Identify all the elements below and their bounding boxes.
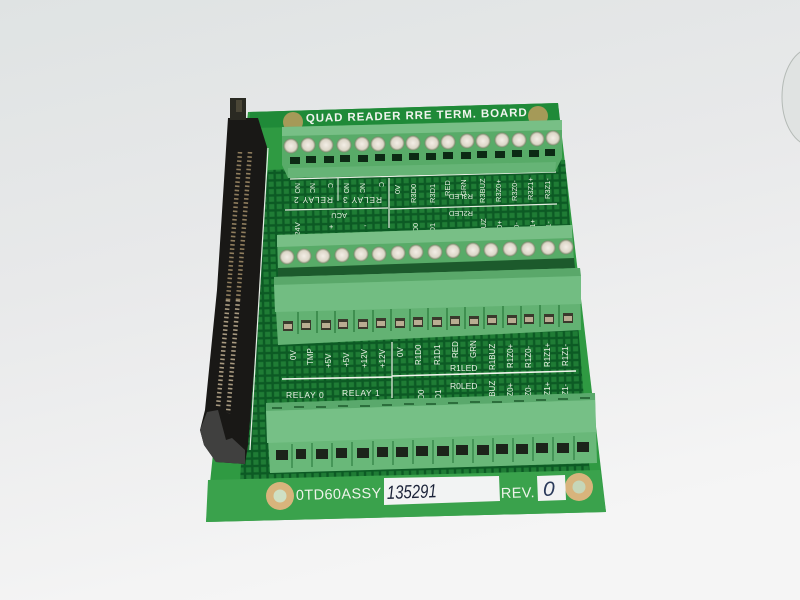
silkscreen labels upper section: RELAY 3 [342,195,382,205]
silkscreen labels upper section: NC [358,183,365,193]
silkscreen labels lower section: R1D0 [414,344,423,365]
silkscreen labels upper section: RED [443,180,452,196]
silkscreen labels upper section: R3Z1- [543,178,552,199]
silkscreen labels lower section: +12V [360,348,369,368]
silkscreen labels upper section: + [329,222,334,231]
grey lens object at right edge [782,48,800,146]
silkscreen labels lower section: 0V [396,347,405,357]
silkscreen labels lower section: R0LED [450,381,477,391]
silkscreen labels lower section: R0BUZ [488,381,497,407]
silkscreen labels lower section: R1Z0- [524,345,533,368]
silkscreen labels lower section: +12V [378,348,387,368]
silkscreen labels upper section: - [364,221,367,230]
serial number sticker: 135291 [386,481,437,504]
circuit board [206,103,606,522]
assembly label: 0TD60ASSY [296,486,382,504]
silkscreen labels lower section: RELAY 1 [342,388,380,398]
silkscreen labels upper section: R2LED [448,209,473,218]
silkscreen labels lower section [282,340,576,410]
mounting hole right [565,473,593,501]
mounting hole left [266,482,294,510]
silkscreen labels upper section: RELAY 2 [293,195,333,205]
silkscreen labels upper section: GRN [459,179,468,196]
silkscreen labels upper section: +24V [293,222,302,240]
revision sticker [537,475,566,501]
silkscreen labels upper section: R2Z1+ [528,219,537,242]
silkscreen labels upper section: C [377,182,384,187]
silkscreen labels lower section: R0Z0- [524,384,533,407]
silkscreen labels upper section: ACU [331,211,347,220]
silkscreen labels lower section: R1Z0+ [506,343,515,368]
revision label: REV. [501,485,535,502]
silkscreen labels lower section: R0D0 [417,389,426,410]
silkscreen labels lower section: 0V [289,350,298,360]
silkscreen labels upper section: R3Z1+ [526,177,535,200]
silkscreen labels lower section: R1BUZ [488,344,497,370]
silkscreen labels upper section: R2Z0+ [495,220,504,243]
silkscreen labels upper section: R2BUZ [479,218,488,243]
silkscreen labels upper section: R2Z0- [512,222,521,243]
silkscreen labels lower section: +5V [324,353,333,368]
silkscreen labels upper section: NO [293,183,300,194]
silkscreen labels lower section: +5V [342,352,351,367]
board title: QUAD READER RRE TERM. BOARD [306,107,528,125]
silkscreen labels upper section: C [326,183,333,188]
silkscreen labels lower section: R1Z1- [561,343,570,366]
silkscreen labels upper section: R3D1 [428,184,437,203]
silkscreen labels upper section: NC [308,183,315,193]
silkscreen labels lower section: R0Z1- [561,383,570,406]
silkscreen labels upper section: R3BUZ [478,178,487,203]
silkscreen labels upper section [285,172,557,243]
terminal block: bottom row [266,393,597,473]
terminal block: second row screws [277,225,575,278]
serial number sticker [384,476,500,505]
silkscreen labels upper section: R3Z0+ [494,179,503,202]
silkscreen labels lower section: GRN [469,340,478,358]
silkscreen labels lower section: R0D1 [434,389,443,410]
terminal block: top row [282,120,562,178]
silkscreen labels lower section: TMP [306,348,315,365]
silkscreen labels lower section: R1D1 [433,344,442,365]
silkscreen labels lower section: R1Z1+ [543,342,552,367]
silkscreen labels lower section: RED [451,341,460,358]
terminal block: third row [274,268,581,345]
silkscreen labels lower section: R1LED [450,363,477,373]
black ribbon connector [200,98,268,464]
silkscreen labels upper section: R3Z0- [510,180,519,201]
revision sticker: 0 [543,478,555,501]
connector pins [218,152,250,413]
silkscreen labels upper section: R2D0 [411,223,420,242]
silkscreen labels upper section: NO [342,183,349,194]
silkscreen labels upper section: R2Z1- [544,221,553,242]
silkscreen labels upper section: R3D0 [409,184,418,203]
silkscreen labels lower section: R0Z0+ [506,382,515,407]
silkscreen labels lower section: R0Z1+ [543,381,552,406]
silkscreen labels upper section: 0V [393,185,402,194]
silkscreen labels upper section: R2D1 [428,223,437,242]
silkscreen labels lower section: RELAY 0 [286,390,324,400]
silkscreen labels upper section: R3LED [448,192,473,201]
